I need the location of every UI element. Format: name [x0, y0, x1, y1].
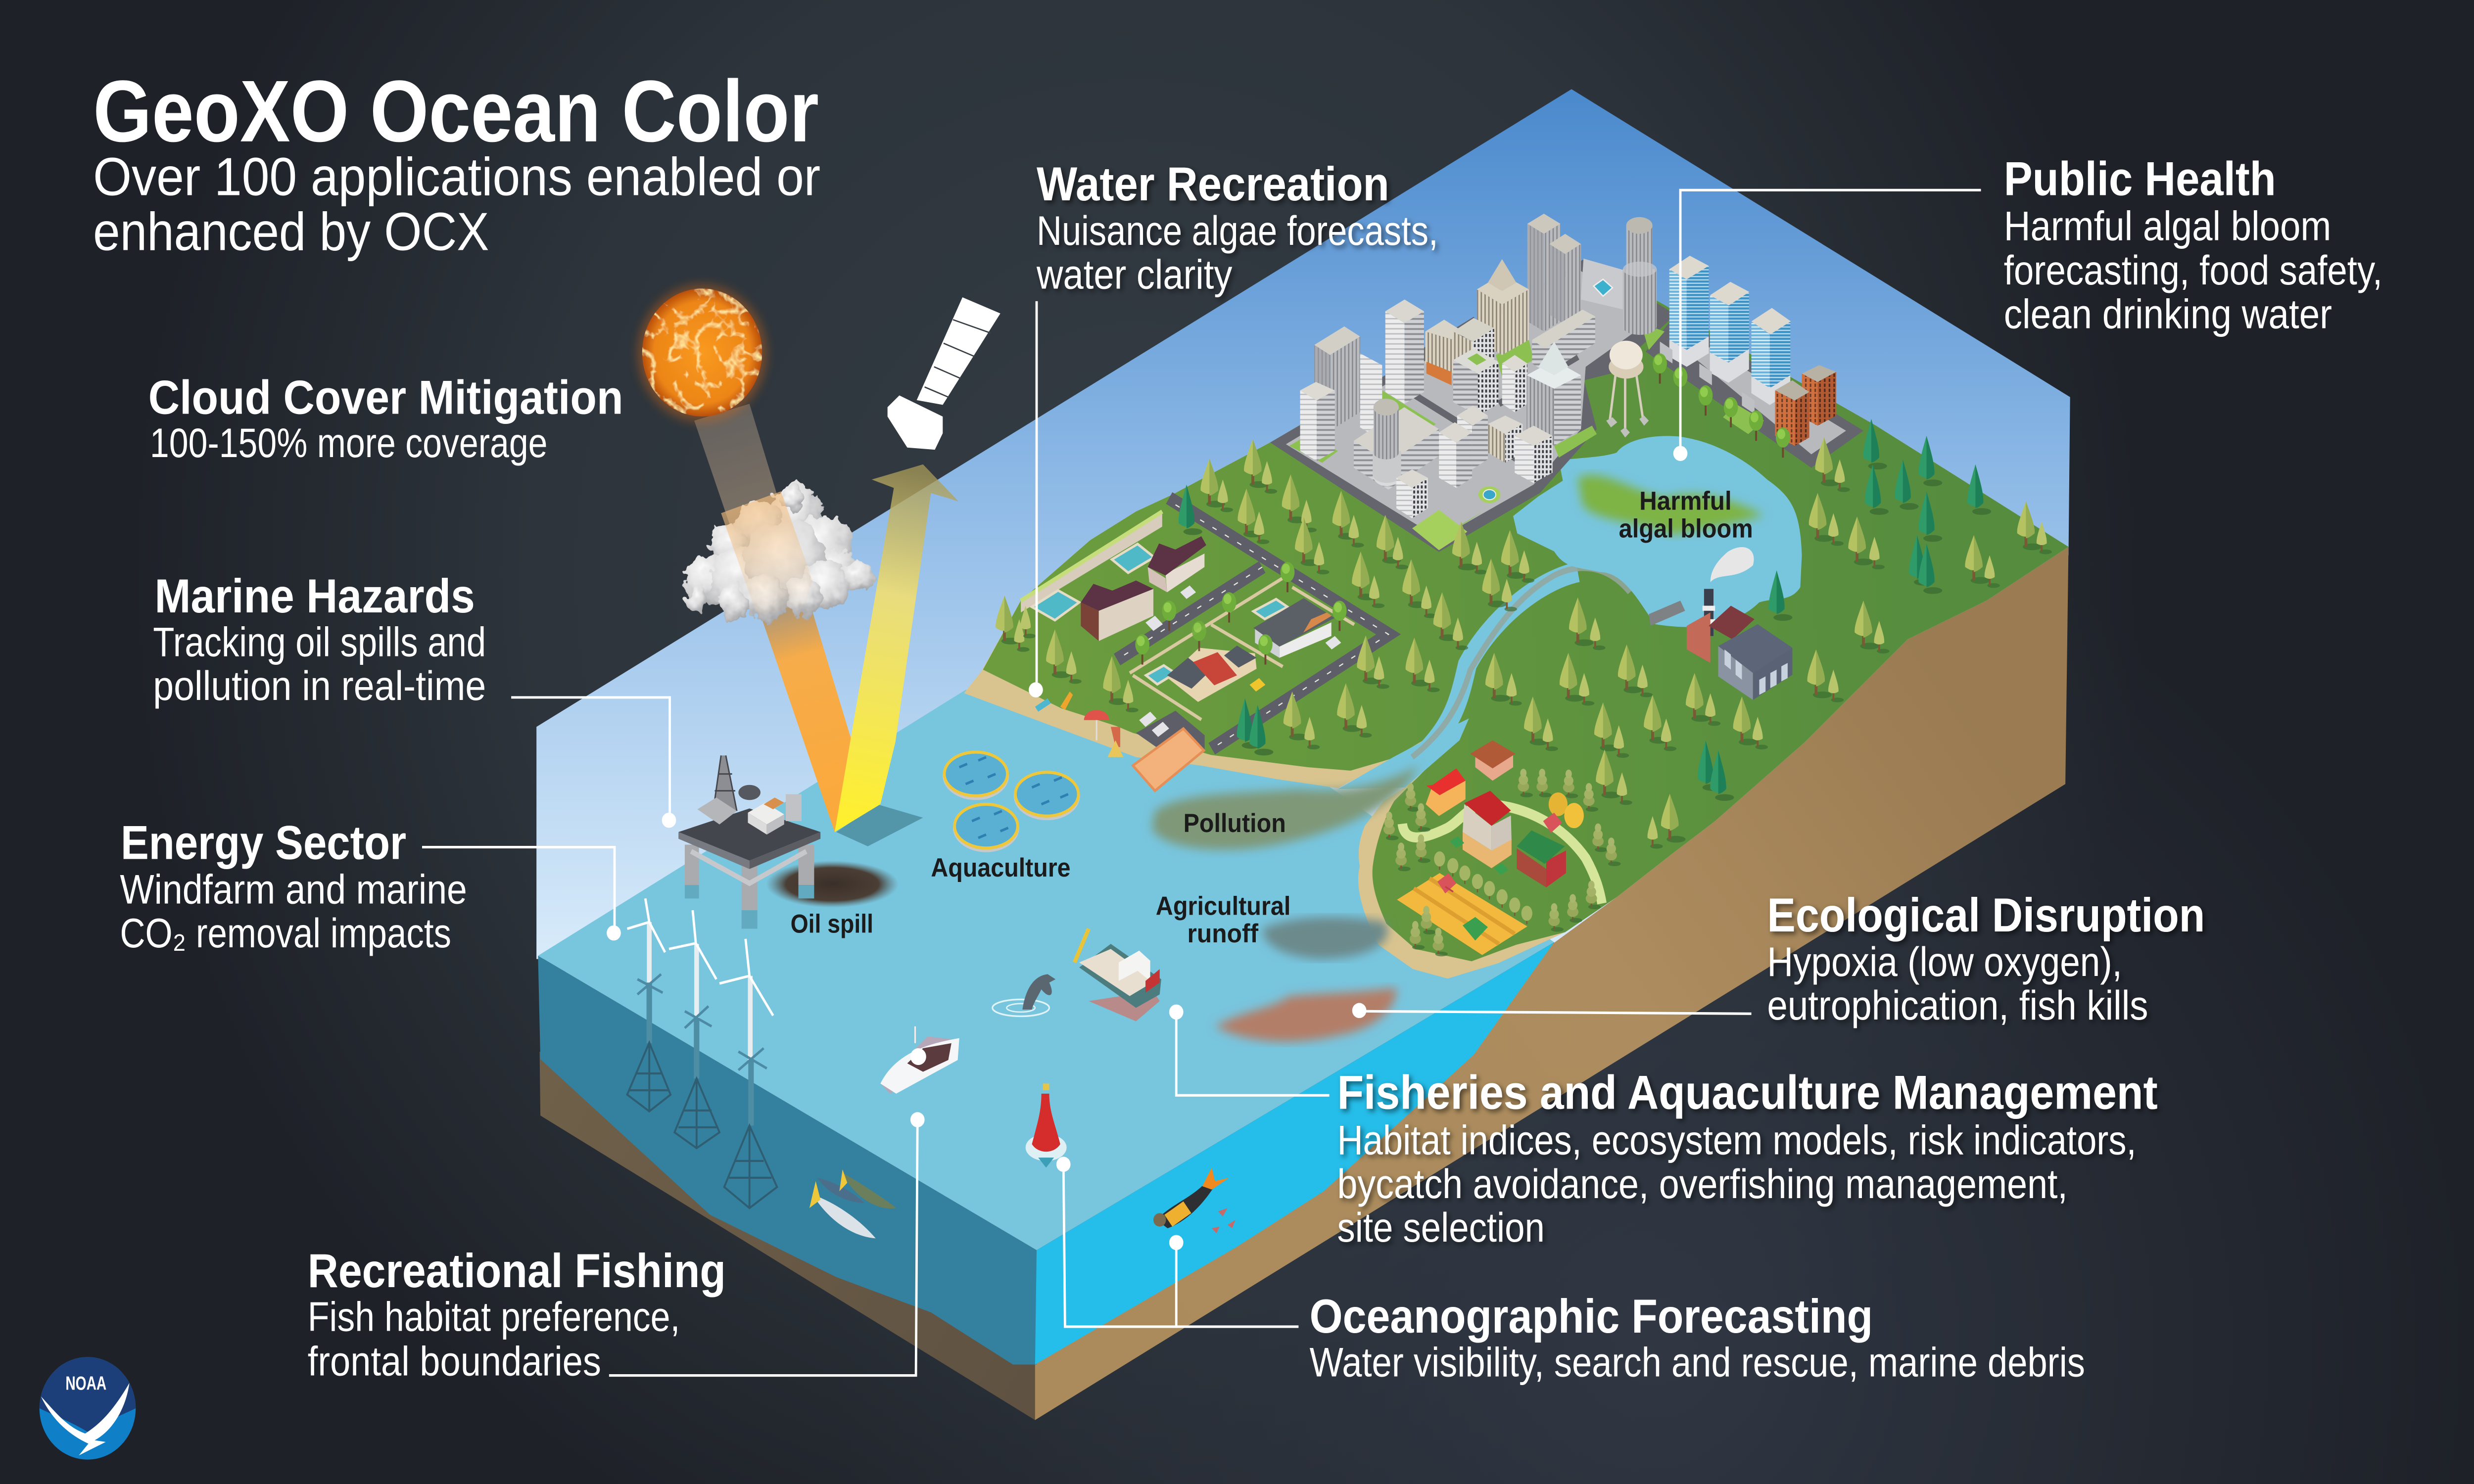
reflected yellow arrow [835, 464, 958, 832]
scene labels: runoff [1188, 919, 1259, 948]
blue tower three [1742, 308, 1791, 414]
orange building front [1775, 380, 1809, 446]
neighborhood [1021, 498, 1388, 791]
dark window block [1453, 348, 1498, 416]
sunlight through cloud [721, 491, 812, 616]
scene labels: Oil spill [791, 909, 873, 938]
house: red roof [1167, 646, 1257, 702]
harmful algal bloom patch [1578, 475, 1764, 535]
white strip block [1360, 353, 1382, 441]
city road pad [1270, 259, 1675, 552]
incoming sunlight beam [694, 404, 852, 832]
callout: marine hazards [153, 569, 486, 709]
callout: public health: Public Health [2004, 152, 2276, 205]
lower white slab two [1439, 422, 1472, 488]
grey tower one [1527, 214, 1561, 331]
title [93, 63, 820, 262]
callout: public health [2004, 152, 2382, 337]
seabed left face [540, 1052, 1037, 1420]
callout: water recreation [1036, 157, 1438, 298]
callout: fisheries and aquaculture management: site selection [1337, 1205, 1545, 1251]
callout: cloud cover mitigation: Cloud Cover Mitigation [148, 371, 623, 424]
bright water right face [1035, 942, 1554, 1365]
leader lines and dots [422, 190, 1981, 1376]
barn [1517, 831, 1566, 887]
city streets [1370, 320, 1578, 468]
pools [1032, 544, 1287, 684]
deep water left face [538, 956, 1037, 1365]
callout: energy sector: Windfarm and marine [120, 867, 467, 913]
narrow windows block [1502, 355, 1527, 412]
title: enhanced by OCX [93, 202, 489, 262]
lake [1513, 436, 1802, 627]
icon: NOAA logo [40, 1357, 136, 1460]
wind turbines [627, 898, 777, 1208]
wheat field [1397, 873, 1527, 955]
callout: public health: Harmful algal bloom [2004, 203, 2331, 249]
cloud [683, 485, 872, 621]
scene labels: Pollution [1184, 809, 1286, 837]
agricultural runoff plume [1262, 917, 1388, 959]
white small tower [1300, 382, 1335, 461]
plaza with pool [1581, 259, 1623, 310]
beige block right [1453, 318, 1494, 385]
callout: fisheries and aquaculture management: Fisheries and Aquaculture Management [1337, 1066, 2158, 1119]
buoy [1026, 1083, 1067, 1168]
farm path [1402, 804, 1602, 904]
trees [996, 419, 2052, 849]
callout: ecological disruption [1767, 888, 2205, 1029]
light beams [694, 404, 958, 832]
small windows block [1396, 469, 1428, 518]
green plots [1289, 266, 1764, 542]
seabed right face [1035, 547, 2068, 1420]
dolphin [993, 974, 1055, 1016]
callout: cloud cover mitigation: 100-150% more coverage [150, 420, 548, 466]
callout: water recreation: Nuisance algae forecasts, [1037, 208, 1438, 254]
house: brick with purple roof [1081, 580, 1153, 641]
callout: ecological disruption: Hypoxia (low oxygen), [1767, 939, 2122, 985]
factory [1649, 547, 1792, 700]
callout: recreational fishing: Fish habitat preference, [308, 1294, 680, 1340]
callout: water recreation: Water Recreation [1037, 157, 1389, 210]
round tower [1623, 217, 1657, 335]
park trees [1653, 353, 1790, 458]
beach people and umbrella [1035, 692, 1123, 757]
grey office [1314, 326, 1360, 431]
tractors and combine [1437, 813, 1562, 940]
callout: ecological disruption: eutrophication, fish kills [1767, 983, 2148, 1029]
long low podium [1354, 407, 1439, 490]
lower white block [1488, 416, 1522, 463]
callout: ecological disruption: Ecological Disruption [1767, 888, 2205, 942]
callout: recreational fishing: Recreational Fishing [308, 1244, 726, 1298]
hypoxia plume [1215, 988, 1396, 1042]
scene labels [791, 486, 1753, 948]
title: GeoXO Ocean Color [93, 63, 819, 160]
callout: recreational fishing: frontal boundaries [308, 1339, 601, 1385]
callout: recreational fishing [308, 1244, 726, 1385]
long low block [1532, 310, 1595, 375]
callout: fisheries and aquaculture management: Habitat indices, ecosystem models, risk indicators, [1337, 1117, 2137, 1163]
river [1338, 568, 1630, 789]
water tower [1606, 341, 1649, 437]
beige block left [1425, 320, 1463, 385]
callout: oceanographic forecasting: Water visibility, search and rescue, marine debris [1310, 1340, 2085, 1386]
callout: marine hazards: Tracking oil spills and [153, 619, 486, 665]
oil spill [766, 861, 899, 908]
callout: cloud cover mitigation [148, 371, 623, 466]
fountain [1478, 486, 1501, 503]
callout: fisheries and aquaculture management: bycatch avoidance, overfishing management, [1337, 1161, 2068, 1207]
roads [1117, 498, 1388, 749]
basketball court [1412, 510, 1468, 550]
title: Over 100 applications enabled or [93, 147, 820, 207]
house: cream with purple roof [1148, 536, 1206, 592]
beam shadow on water [836, 804, 923, 846]
cars [1139, 586, 1341, 737]
aquaculture pens [943, 751, 1080, 852]
scene labels: Harmful [1639, 486, 1732, 515]
street trees [1135, 562, 1347, 665]
blue tower one [1660, 256, 1709, 367]
fences [1130, 578, 1354, 720]
sky back wall [536, 89, 2070, 959]
grey tower two [1549, 234, 1581, 325]
farm trees [1383, 769, 1621, 956]
timber shelter [1470, 741, 1516, 781]
white tower [1385, 299, 1424, 404]
scene labels: algal bloom [1619, 514, 1753, 543]
red shed [1426, 768, 1466, 816]
farmhouse [1463, 791, 1512, 868]
city sidewalk blocks [1286, 269, 1657, 538]
lower white slab one [1457, 406, 1488, 469]
diver [1153, 1168, 1236, 1233]
callout: oceanographic forecasting: Oceanographic Forecasting [1310, 1289, 1873, 1343]
water surface [538, 690, 1554, 1250]
blue tower two [1699, 282, 1749, 385]
pier [1133, 729, 1204, 791]
scene labels: Agricultural [1156, 891, 1290, 921]
callout: public health: clean drinking water [2004, 291, 2332, 337]
callout: energy sector: Energy Sector [121, 816, 406, 869]
farm peninsula [1383, 741, 1621, 956]
scene labels: Aquaculture [931, 853, 1071, 882]
callout: energy sector [120, 816, 467, 957]
orange building back [1802, 365, 1836, 426]
lower round tower [1373, 399, 1401, 486]
callout: water recreation: water clarity [1036, 252, 1233, 298]
callout: oceanographic forecasting [1310, 1289, 2085, 1386]
pollution plume [1152, 766, 1419, 850]
back garden wall [1021, 511, 1162, 612]
satellite [888, 297, 1000, 450]
art deco tower [1526, 341, 1581, 446]
callout: energy sector: CO₂ removal impacts [120, 911, 451, 957]
speedboat [880, 1026, 959, 1094]
silos [1549, 792, 1584, 828]
east pad [1646, 315, 1863, 468]
lower white block two [1515, 426, 1553, 483]
panel: isometric ocean and land block [536, 89, 2070, 1420]
icon: NOAA logo: NOAA [65, 1373, 106, 1394]
fish school [809, 1169, 896, 1238]
sand shoreline [964, 259, 2068, 978]
fishing boat [1075, 929, 1161, 1021]
callout: public health: forecasting, food safety, [2004, 248, 2382, 293]
beige tower [1477, 259, 1529, 355]
callout: marine hazards: pollution in real-time [153, 663, 486, 709]
sun [637, 284, 767, 422]
callout: fisheries and aquaculture management [1337, 1066, 2158, 1251]
green land [983, 259, 2068, 961]
oil platform [678, 755, 820, 929]
callout: marine hazards: Marine Hazards [154, 569, 475, 623]
house: grey roof [1253, 598, 1334, 658]
city [1270, 214, 1863, 552]
